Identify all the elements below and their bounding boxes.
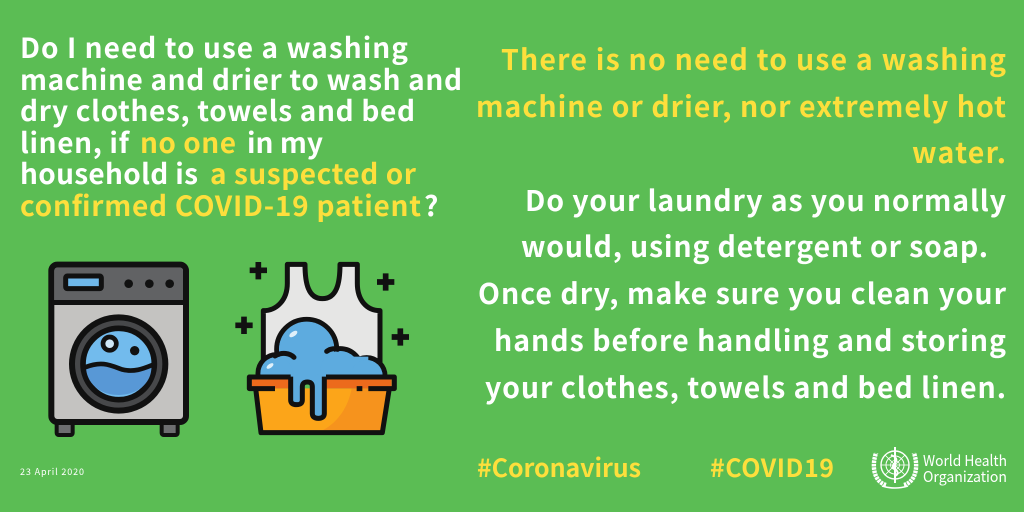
logo: World Health Organization	[874, 447, 1007, 488]
question heading: a suspected or	[210, 153, 417, 193]
icon: laundry basin with shirt and foam	[235, 262, 409, 433]
answer text block: hands before handling and storing	[494, 319, 1006, 360]
question heading: ?	[424, 185, 438, 225]
hashtag: Coronavirus: #Coronavirus	[477, 449, 641, 485]
question heading: confirmed COVID-19 patient	[20, 185, 421, 225]
answer text block: your clothes, towels and bed linen.	[485, 366, 1006, 407]
icon: sparkles	[235, 262, 409, 346]
icon: foam	[256, 316, 388, 377]
answer text block: There is no need to use a washing	[501, 38, 1006, 79]
icon: WHO emblem	[874, 447, 916, 488]
question heading: in my	[247, 122, 323, 162]
answer text block: would, using detergent or soap.	[521, 225, 988, 266]
logo text: World Health	[923, 450, 1007, 471]
date: 23 April 2020	[20, 465, 84, 478]
question heading: linen, if	[20, 122, 131, 162]
question heading: dry clothes, towels and bed	[20, 90, 415, 130]
icon: washing machine	[51, 265, 186, 435]
question heading: machine and drier to wash and	[20, 59, 462, 99]
answer text block	[476, 38, 1007, 407]
answer text block: Do your laundry as you normally	[525, 179, 1006, 220]
icon: basin	[256, 388, 389, 433]
icon: basin rim and drips	[249, 376, 394, 418]
hashtag: COVID19: #COVID19	[710, 449, 834, 485]
question heading: household is	[20, 153, 198, 193]
answer text block: water.	[912, 131, 1006, 172]
question heading	[20, 27, 462, 225]
icon: tank top	[263, 264, 380, 370]
answer text block: machine or drier, nor extremely hot	[476, 85, 1006, 126]
answer text block: Once dry, make sure you clean your	[478, 272, 1007, 313]
logo: World Health Organization: Organization	[923, 466, 1007, 487]
question heading: no one	[140, 122, 236, 162]
question heading: Do I need to use a washing	[20, 27, 408, 67]
